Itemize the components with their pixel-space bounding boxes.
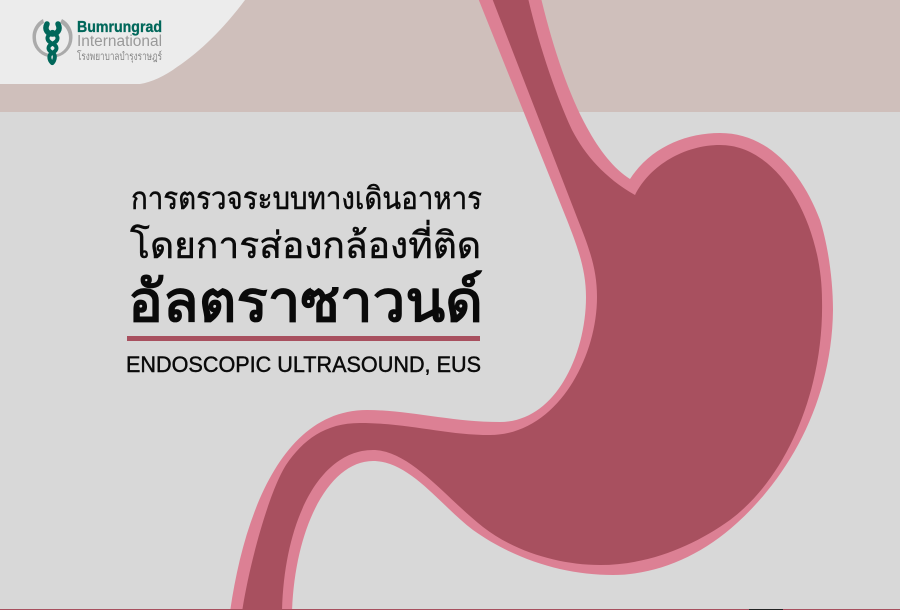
stomach wall bbox=[230, 0, 833, 610]
logo text: International: International bbox=[77, 33, 162, 50]
icon: caduceus bbox=[46, 24, 59, 63]
title underline bbox=[127, 336, 480, 341]
title line 2: โดยการส่องกล้องที่ติด bbox=[130, 219, 481, 266]
header band bbox=[0, 0, 900, 112]
title line 1: การตรวจระบบทางเดินอาหาร bbox=[131, 181, 482, 216]
title line 3: อัลตราซาวนด์ bbox=[128, 270, 483, 334]
icon: grey ring bbox=[32, 19, 73, 57]
bottom edge line bbox=[0, 609, 900, 610]
logo bbox=[32, 19, 162, 63]
stomach illustration bbox=[230, 0, 833, 610]
subtitle: ENDOSCOPIC ULTRASOUND, EUS bbox=[126, 352, 481, 377]
logo background panel bbox=[0, 0, 245, 84]
stomach interior bbox=[242, 0, 822, 610]
logo text: Bumrungrad: Bumrungrad bbox=[77, 19, 162, 36]
logo text: Thai name: โรงพยาบาลบำรุงราษฎร์ bbox=[77, 49, 162, 63]
title block bbox=[126, 181, 483, 377]
